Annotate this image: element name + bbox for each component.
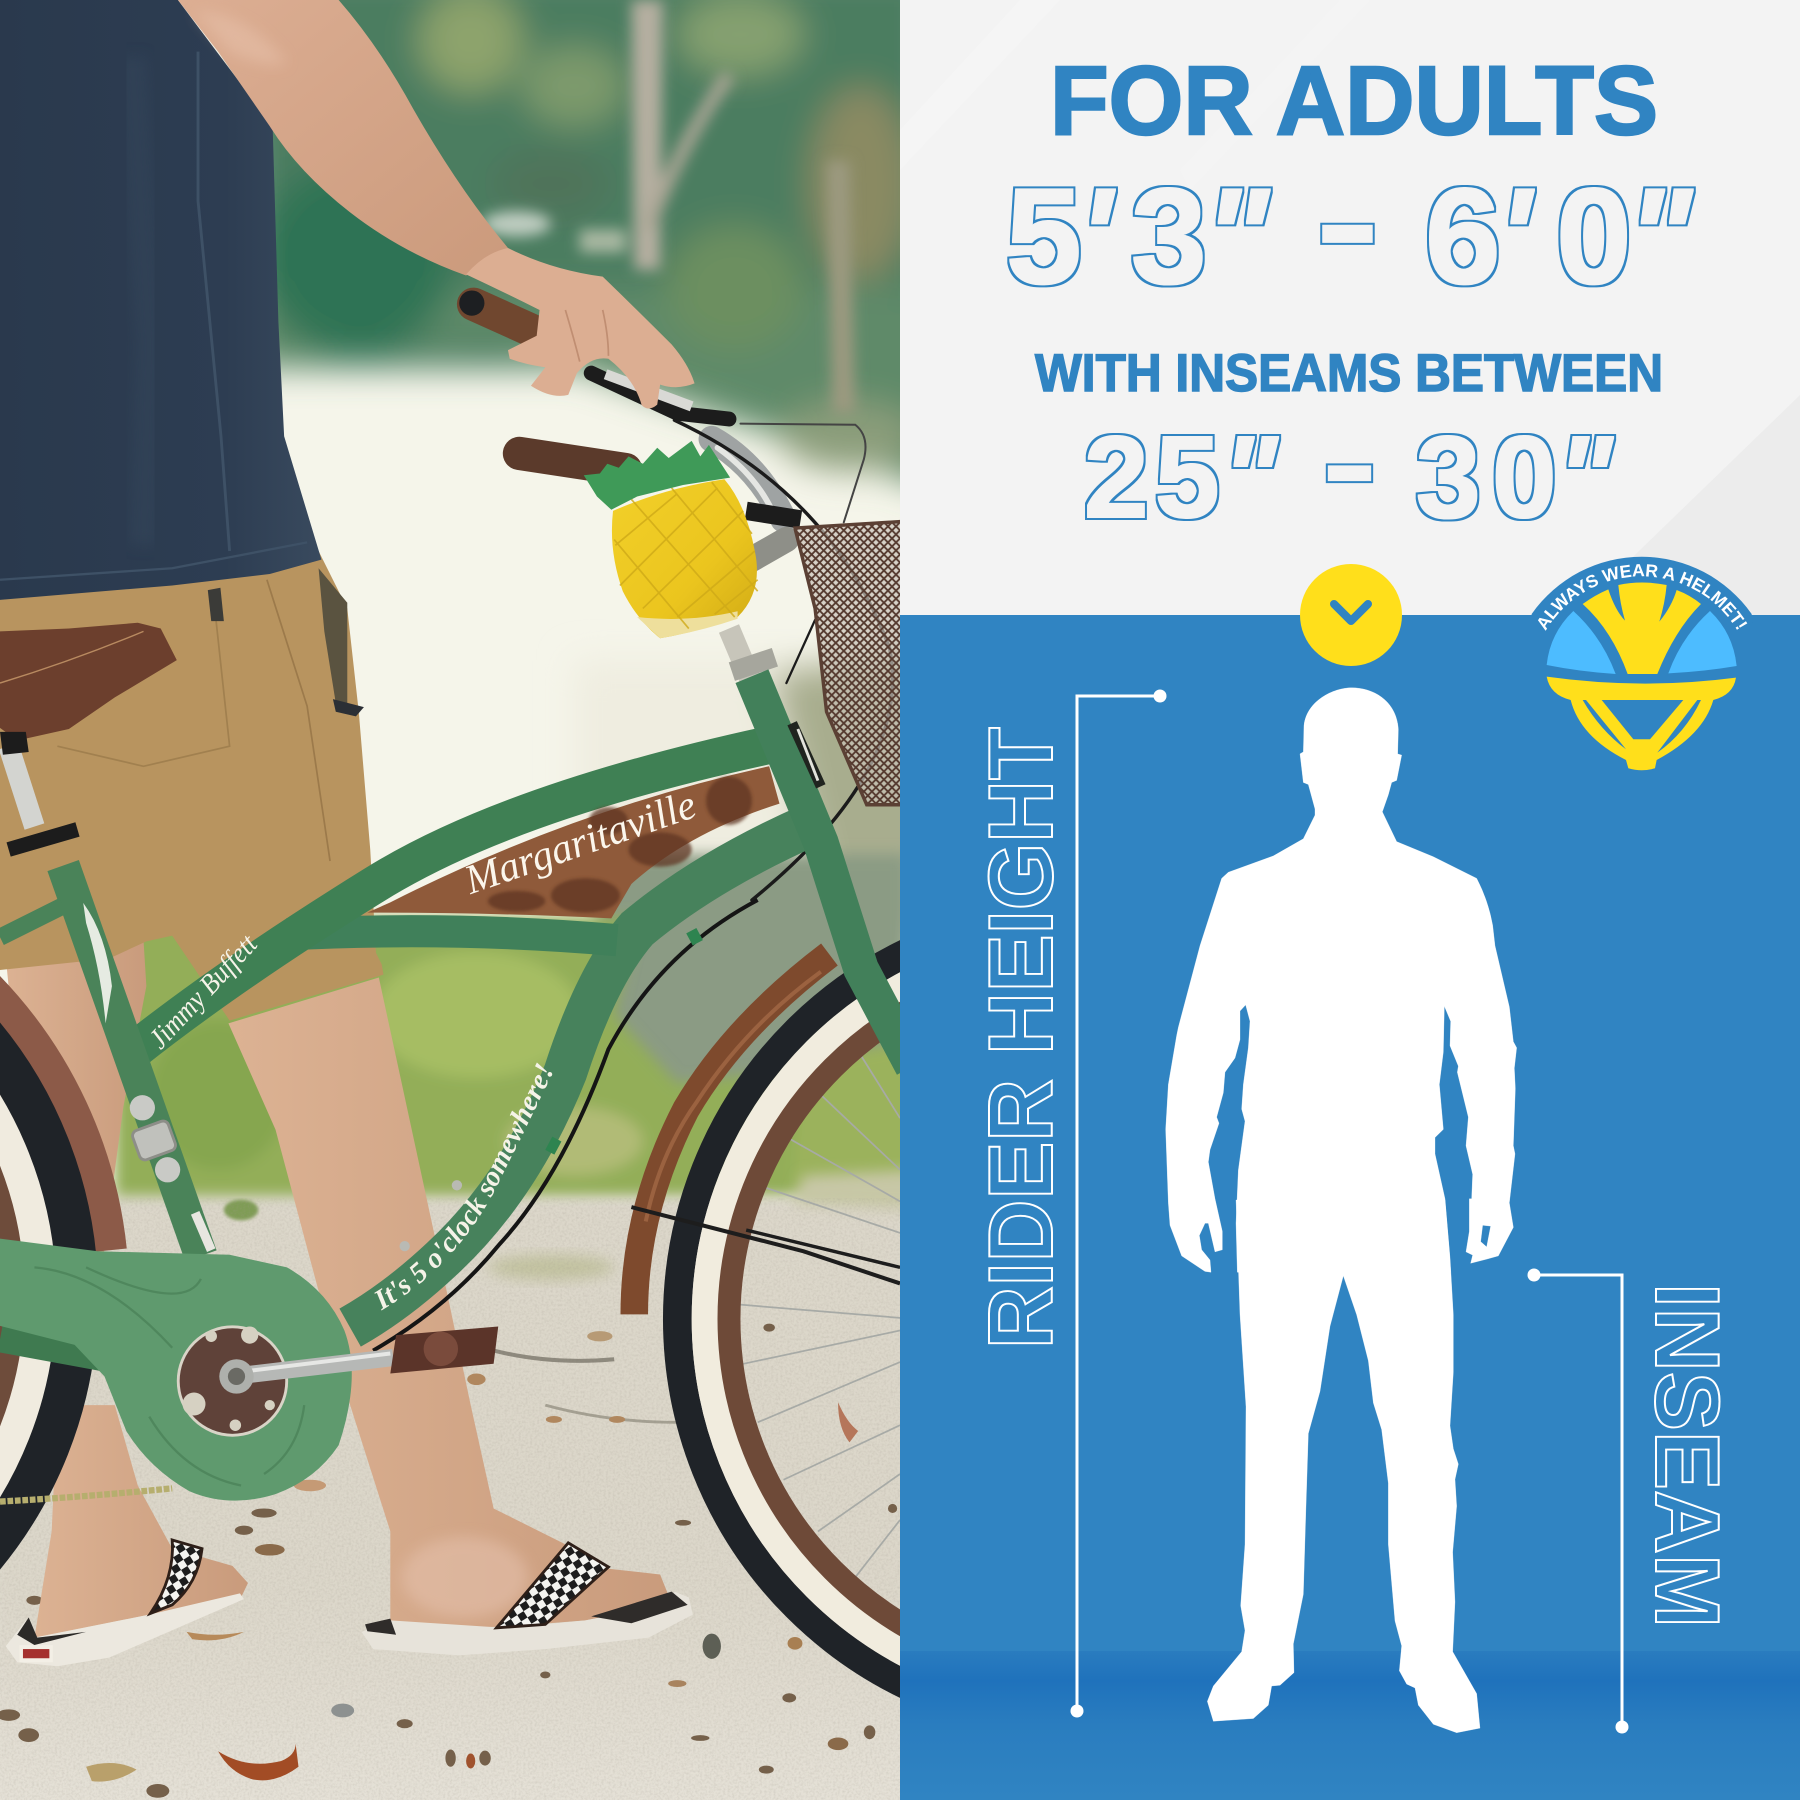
downtube and tubes bbox=[350, 825, 809, 1328]
wire basket bbox=[795, 521, 907, 805]
frame lettering: Jimmy Buffett bbox=[142, 928, 264, 1055]
height range: ' bbox=[1498, 160, 1535, 312]
rear leg and foot bbox=[6, 940, 248, 1666]
icon: yellow chevron circle bbox=[1300, 564, 1402, 666]
inseam range: – bbox=[1326, 386, 1373, 541]
inseam measure line bbox=[1528, 1268, 1628, 1734]
height range: 3 bbox=[1131, 160, 1207, 312]
wooden panel with Margaritaville lettering bbox=[367, 766, 779, 918]
rear bicycle wheel and fender bbox=[0, 976, 127, 1570]
arm bbox=[178, 0, 508, 276]
parrot decal bbox=[83, 903, 112, 1023]
inseam range: 5 bbox=[1155, 412, 1220, 542]
title: for adults: FOR ADULTS bbox=[1050, 46, 1658, 155]
saddle bbox=[0, 623, 177, 740]
icon: always wear a helmet badge: ALWAYS WEAR A HELMET! bbox=[1538, 564, 1748, 631]
rear flip-flop bbox=[6, 1540, 244, 1666]
front grip bbox=[474, 304, 531, 330]
height range: ' bbox=[1079, 160, 1116, 312]
inseam range: " bbox=[1557, 412, 1614, 542]
floor band bbox=[900, 1651, 1800, 1800]
frame lettering: It's 5 o'clock somewhere! bbox=[374, 1062, 552, 1310]
chain bbox=[0, 1488, 172, 1502]
head tube badge bbox=[792, 723, 821, 786]
pedal bbox=[390, 1326, 498, 1374]
inseam range: 0 bbox=[1492, 412, 1557, 542]
rider height measure line bbox=[1070, 690, 1166, 1718]
height range: " bbox=[1204, 160, 1270, 312]
green bicycle frame bbox=[0, 669, 900, 1505]
rider silhouette bbox=[1166, 688, 1517, 1733]
pineapple cup holder bbox=[584, 441, 758, 638]
icon: always wear a helmet badge bbox=[1532, 556, 1752, 770]
inseam range: " bbox=[1222, 412, 1279, 542]
blue height chart panel bbox=[900, 615, 1800, 1800]
inseam range: 3 bbox=[1416, 412, 1481, 542]
front leg and foot bbox=[228, 977, 693, 1655]
height range: 6 bbox=[1425, 160, 1501, 312]
height range: " bbox=[1627, 160, 1693, 312]
photo background: blurred forest, lake, grass and sand bbox=[0, 0, 947, 1800]
chainguard, sprocket, crank and pedal bbox=[0, 1239, 498, 1501]
shirt bbox=[0, 0, 321, 600]
handlebars, grips and stem bbox=[459, 290, 801, 683]
rear grip bbox=[519, 453, 626, 470]
pineapple crown bbox=[584, 441, 730, 510]
photo: man with green cruiser bicycle bbox=[0, 0, 900, 1800]
shorts bbox=[0, 551, 383, 1021]
subheading: with inseams between: WITH INSEAMS BETWEEN bbox=[1035, 344, 1663, 403]
label: inseam: INSEAM bbox=[1636, 1283, 1737, 1628]
height range: 5 bbox=[1006, 160, 1082, 312]
cables bbox=[674, 420, 893, 900]
height range: 0 bbox=[1556, 160, 1632, 312]
label: rider height: RIDER HEIGHT bbox=[971, 727, 1072, 1349]
front bicycle wheel with spokes and fender bbox=[620, 940, 900, 1698]
seat post bbox=[0, 732, 77, 850]
inseam range bbox=[1084, 386, 1614, 542]
inseam range: 2 bbox=[1084, 412, 1149, 542]
hand bbox=[466, 248, 695, 409]
bottle opener hardware bbox=[130, 928, 703, 1251]
frame lettering bbox=[102, 936, 552, 1357]
height range bbox=[1006, 130, 1693, 313]
height range: – bbox=[1320, 130, 1375, 313]
right panel background bbox=[900, 0, 1800, 620]
wooden panel with Margaritaville lettering: Margaritaville bbox=[458, 781, 702, 903]
front flip-flop with checkered strap bbox=[362, 1543, 693, 1655]
